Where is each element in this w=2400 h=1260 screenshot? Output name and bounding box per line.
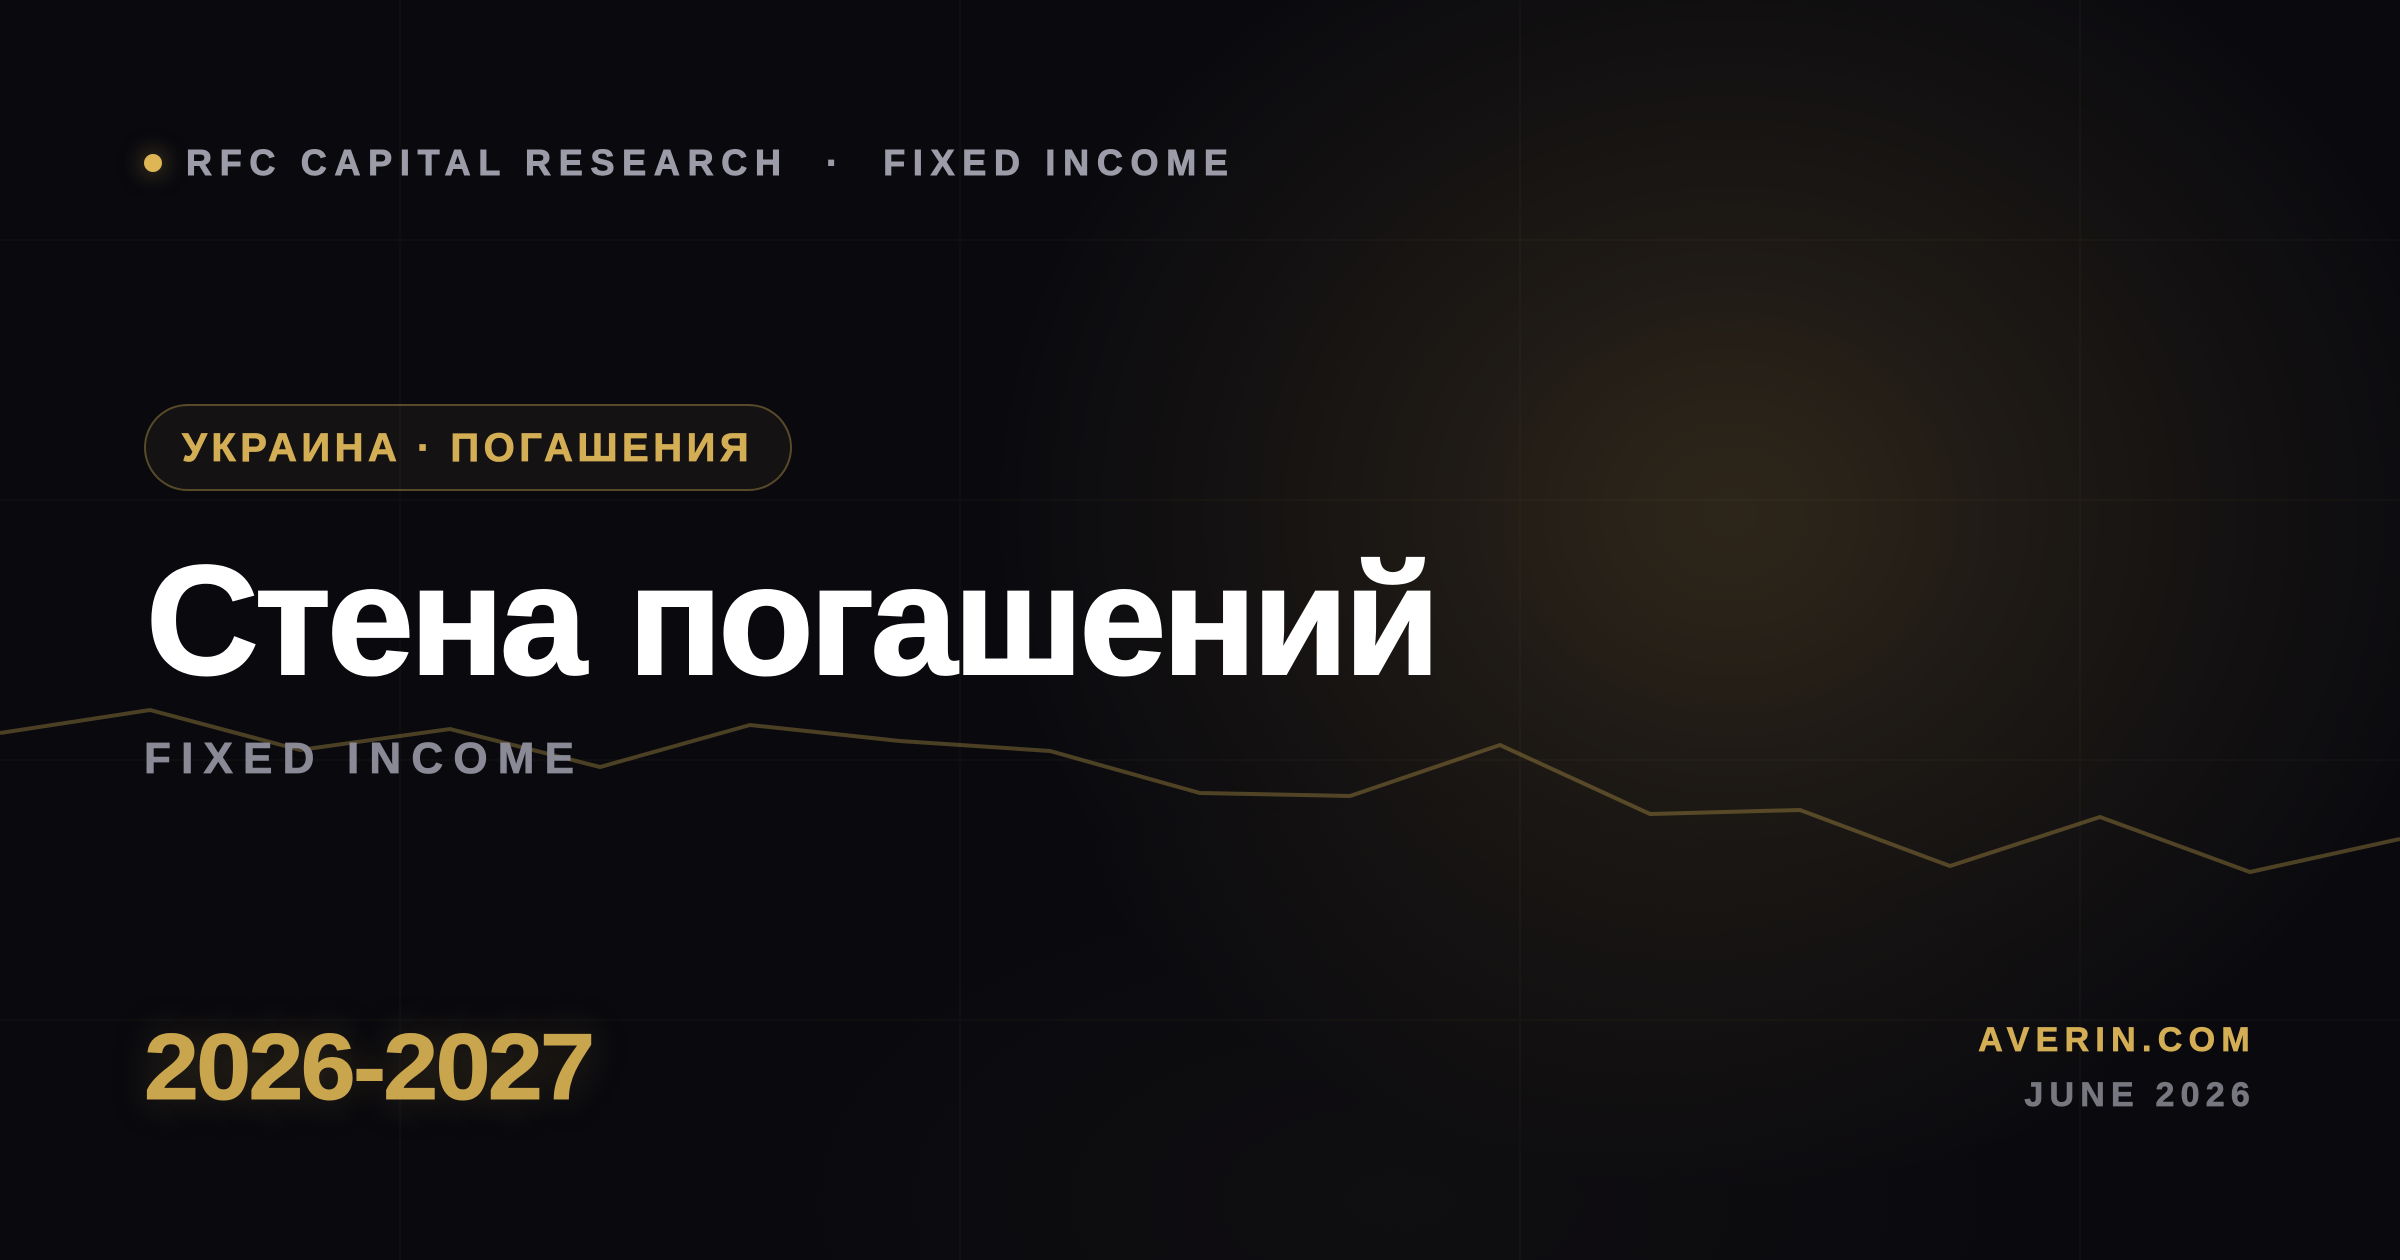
header text: RFC CAPITAL RESEARCH · FIXED INCOME: [186, 142, 1236, 182]
date: JUNE 2026: [2024, 1076, 2256, 1114]
site name: AVERIN.COM: [1978, 1021, 2256, 1059]
icon: glowing gold dot: [144, 154, 162, 172]
tag pill: [144, 404, 792, 491]
header row: [134, 142, 1236, 182]
subtitle: FIXED INCOME: [144, 734, 584, 783]
tag text: УКРАИНА · ПОГАШЕНИЯ: [182, 426, 753, 470]
year range: 2026-2027: [144, 1014, 592, 1119]
title: Стена погашений: [146, 534, 1436, 708]
